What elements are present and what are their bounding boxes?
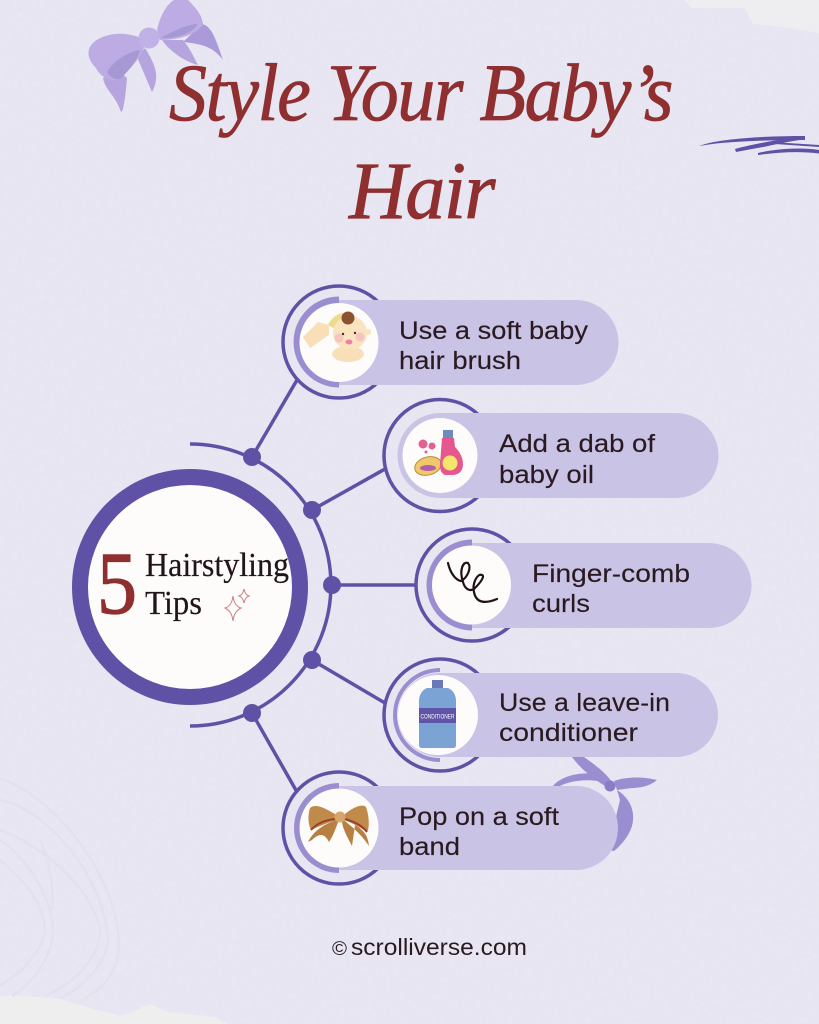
text — [399, 803, 559, 861]
icon: conditioner bottle — [419, 680, 456, 748]
text: Add a dab of — [499, 430, 655, 458]
connector dots — [243, 448, 341, 722]
torn paper: bottom left — [0, 995, 228, 1024]
connector lines — [252, 380, 417, 792]
icon: sparkles — [225, 589, 249, 621]
heading: Hairstyling Tips: Tips — [145, 585, 202, 622]
panel: tip 5 — [283, 772, 618, 884]
title: Hair — [348, 145, 497, 236]
icon: brown bow — [308, 806, 369, 846]
faint scribble circles — [0, 778, 119, 998]
icon: baby oil and soap — [413, 430, 463, 478]
text: band — [399, 833, 460, 861]
torn paper: top right — [684, 0, 819, 33]
text — [499, 689, 670, 747]
title — [169, 47, 672, 236]
footer credit: © — [332, 939, 347, 960]
text: Use a soft baby — [399, 317, 589, 345]
text: Finger-comb — [532, 560, 690, 588]
decorative brush strokes — [699, 136, 819, 155]
heading: Hairstyling Tips: Hairstyling — [145, 547, 289, 584]
panel: tip 4 — [384, 659, 718, 771]
icon: purple headband — [553, 757, 657, 851]
text: Pop on a soft — [399, 803, 559, 831]
heading: Hairstyling Tips — [145, 547, 289, 622]
footer credit: scrolliverse.com — [351, 934, 527, 960]
panel: tip 1 — [283, 286, 618, 398]
panel: tip 2 — [384, 400, 719, 512]
connector arc around centre — [190, 444, 331, 726]
text — [399, 317, 589, 375]
text: baby oil — [499, 461, 594, 489]
icon: baby with brush — [303, 312, 371, 362]
text: curls — [532, 590, 590, 618]
icon: curl — [448, 563, 497, 602]
number 5: 5 — [97, 535, 137, 633]
panel: centre circle — [80, 477, 300, 697]
text — [499, 430, 655, 489]
title: Style Your Baby’s — [169, 47, 672, 138]
icon: conditioner bottle: CONDITIONER — [420, 714, 455, 720]
text: hair brush — [399, 347, 521, 375]
text: conditioner — [499, 719, 638, 747]
text — [532, 560, 690, 618]
text: Use a leave-in — [499, 689, 670, 717]
panel: tip 3 — [416, 529, 752, 641]
icon: purple bow — [88, 0, 223, 112]
